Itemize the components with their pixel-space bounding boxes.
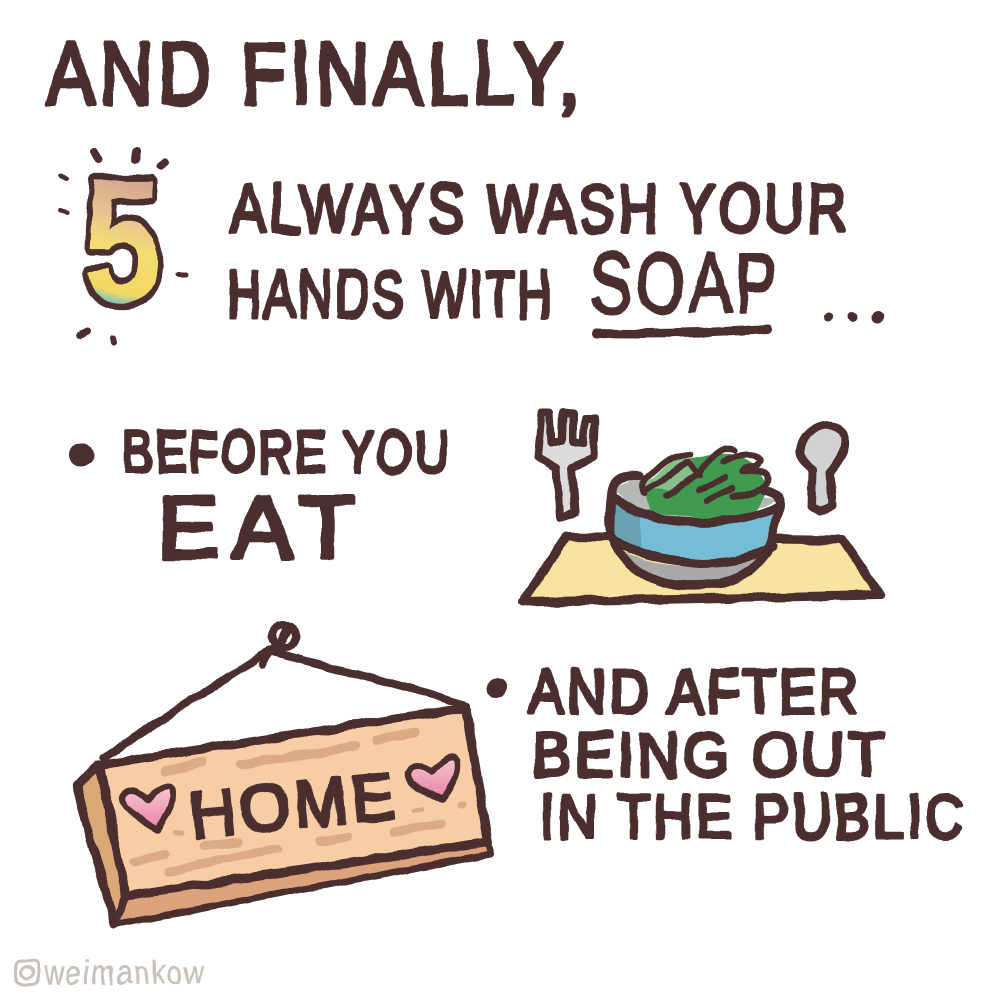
heart left xyxy=(122,787,173,830)
text: before you: BEFORE YOU xyxy=(122,420,451,485)
heading: hands with: HANDS WITH xyxy=(227,257,554,331)
heading: always wash your: ALWAYS WASH YOUR xyxy=(230,171,850,247)
placemat xyxy=(522,536,880,602)
fork xyxy=(538,412,595,517)
emphasised word: soap: SOAP xyxy=(590,236,781,330)
salad leaves xyxy=(643,449,768,501)
illustration: meal xyxy=(522,412,880,602)
wood grain xyxy=(134,733,463,871)
icon: camera xyxy=(16,961,38,985)
ellipsis dots xyxy=(824,310,884,324)
icon: number 5 with sparkles xyxy=(61,144,186,343)
handle: weimankow xyxy=(43,954,206,992)
watermark xyxy=(16,954,206,992)
numeral 5: 5 xyxy=(83,144,162,340)
sign front xyxy=(100,708,488,896)
text: being out: BEING OUT xyxy=(532,721,887,790)
illustration: home sign xyxy=(76,625,491,925)
bullet xyxy=(69,443,93,467)
text: and after: AND AFTER xyxy=(528,658,861,727)
hanging string xyxy=(105,625,466,757)
spoon xyxy=(800,425,847,512)
sparkles xyxy=(61,151,186,343)
bullet xyxy=(487,678,507,698)
sign side face xyxy=(76,765,126,925)
text: eat: EAT xyxy=(158,478,368,577)
sign bottom face xyxy=(115,842,491,925)
heart right xyxy=(408,757,458,799)
bowl xyxy=(609,454,780,586)
title: AND FINALLY, xyxy=(46,24,583,123)
word: home: HOME xyxy=(186,758,401,852)
